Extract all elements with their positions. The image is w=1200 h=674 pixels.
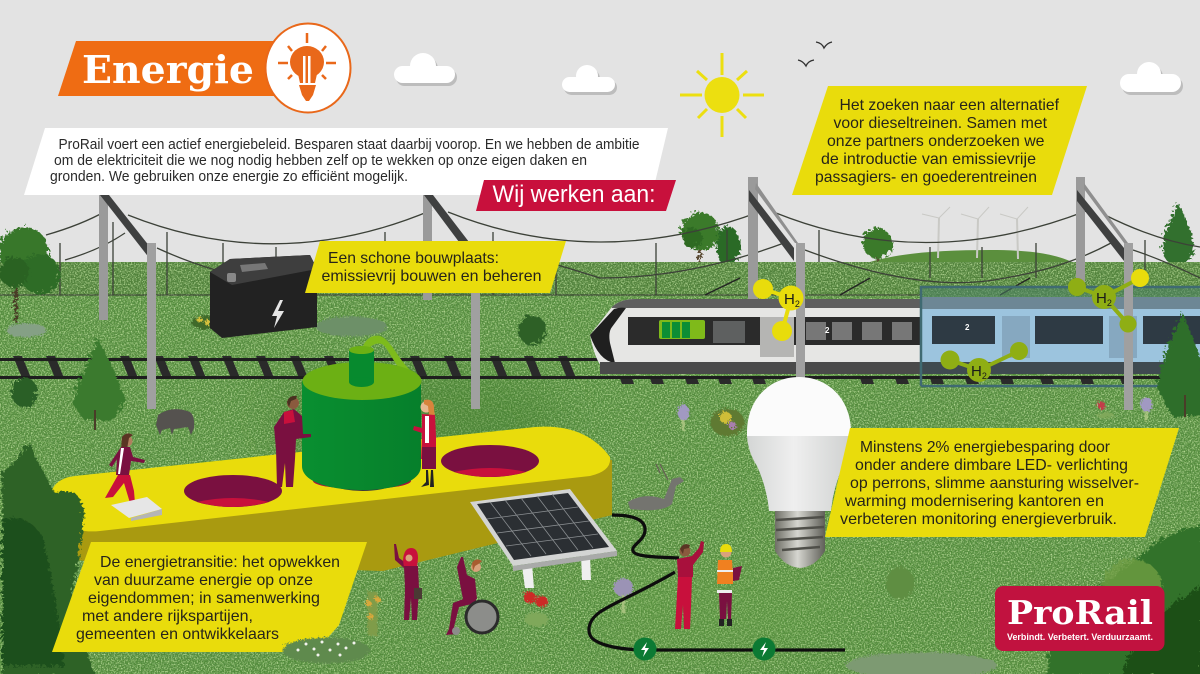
hydrogen molecules [753, 269, 1149, 382]
solar panel [470, 489, 617, 588]
heading: wij werken aan: Wij werken aan: [492, 181, 656, 208]
H2 molecule 1: 2 [795, 299, 800, 309]
H2 molecule 1: H [784, 291, 795, 308]
callout: energiebesparing: verbeteren monitoring energieverbruik. [840, 511, 1117, 528]
cloud left [394, 53, 457, 86]
board top [50, 427, 610, 531]
callout: energietransitie: gemeenten en ontwikkelaars [76, 626, 279, 643]
H2 molecule 2 [1068, 269, 1149, 332]
H2 molecule 3: 2 [982, 371, 987, 381]
small flowers and shrubs [5, 314, 1151, 674]
callout: energietransitie: van duurzame energie op onze [94, 572, 313, 589]
train body white [590, 299, 920, 374]
socket hole right [441, 445, 539, 477]
front pylons [147, 242, 1133, 410]
cloud middle [562, 65, 617, 95]
callout: dieseltreinen [792, 86, 1087, 195]
callout: dieseltreinen: Het zoeken naar een alternatief [840, 97, 1060, 114]
pylons back row [99, 177, 1128, 320]
cable energy nodes [634, 638, 776, 660]
banner ribbon [58, 41, 285, 96]
callout: energiebesparing: onder andere dimbare LED- verlichting [855, 457, 1128, 474]
socket under plug [313, 473, 411, 489]
intro text panel: ProRail voert een actief energiebeleid. Besparen staat daarbij voorop. En we hebben de ambitie [58, 136, 640, 153]
board side [50, 460, 612, 571]
battery [210, 255, 317, 338]
train roof [612, 299, 920, 308]
railway track [0, 356, 1200, 384]
callout: energiebesparing: op perrons, slimme aansturing wisselver- [850, 475, 1139, 492]
boar [156, 409, 194, 435]
figure: man beside plug [274, 396, 311, 487]
intro text panel [24, 128, 668, 195]
callout: energiebesparing: warming modernisering kantoren en [844, 493, 1104, 510]
train doors and windows: 2 [825, 326, 830, 335]
train [590, 287, 1200, 386]
intro text panel: gronden. We gebruiken onze energie zo efficiënt mogelijk. [50, 168, 408, 185]
callout: dieseltreinen: passagiers- en goederentreinen [815, 169, 1037, 186]
hill with wind turbines [870, 207, 1072, 262]
undercarriage [600, 362, 920, 374]
trees in field [0, 225, 1200, 597]
white flowering shrub [281, 636, 369, 662]
train front [590, 308, 626, 363]
power cable [589, 515, 845, 650]
pantograph wires and overhead lines [0, 210, 1200, 299]
H2 molecule 1 [753, 279, 804, 341]
grass field [0, 262, 1200, 674]
figure: woman with headscarf [394, 544, 422, 620]
intro text panel: om de elektriciteit die we nog nodig hebben zelf op te wekken op onze eigen daken en [54, 152, 587, 169]
train doors and windows [713, 317, 912, 357]
icon: birds [798, 42, 832, 66]
title banner [58, 24, 350, 112]
battery icon on train [659, 320, 705, 339]
icon: sun [680, 53, 764, 137]
right foreground bush [1045, 524, 1200, 674]
trees on horizon [679, 200, 1192, 264]
figure: worker in hi-vis vest [717, 544, 742, 626]
callout: energiebesparing [825, 428, 1179, 537]
figure: woman beside plug [413, 400, 436, 487]
left foreground bush [0, 440, 94, 674]
cloud right [1120, 62, 1183, 95]
callout: energietransitie [52, 542, 367, 652]
power strip: yellow plug board [50, 427, 612, 571]
H2 molecule 3: H [971, 363, 982, 380]
ProRail logo [995, 586, 1164, 651]
callout: schone bouwplaats: Een schone bouwplaats: [328, 250, 499, 267]
title text: Energie [82, 47, 254, 92]
callout: energiebesparing: Minstens 2% energiebesparing door [860, 439, 1111, 456]
callout: energietransitie: De energietransitie: het opwekken [100, 554, 340, 571]
callout: energietransitie: eigendommen; in samenwerking [88, 590, 320, 607]
H2 molecule 2: H [1096, 290, 1107, 307]
blue carriage [920, 297, 1200, 374]
green plug cylinder [302, 336, 422, 490]
figure: person waving near cable [675, 541, 704, 629]
ProRail logo: ProRail [1007, 593, 1153, 632]
callout: dieseltreinen: onze partners onderzoeken we [827, 133, 1045, 150]
figure: stepping woman [105, 433, 162, 521]
LED light bulb [747, 377, 851, 568]
callout: dieseltreinen: voor dieseltreinen. Samen met [834, 115, 1048, 132]
glass overlay frame [921, 287, 1200, 386]
blue carriage: 2 [965, 323, 970, 332]
figure: person in wheelchair [446, 557, 498, 635]
callout: schone bouwplaats [305, 241, 566, 293]
socket hole left [184, 475, 282, 507]
deer [628, 464, 684, 510]
train window band [628, 317, 920, 345]
callout: schone bouwplaats: emissievrij bouwen en beheren [322, 268, 542, 285]
callout: energietransitie: met andere rijkspartijen, [82, 608, 253, 625]
lightbulb icon [266, 24, 350, 112]
callout: dieseltreinen: de introductie van emissievrije [821, 151, 1036, 168]
H2 molecule 3 [940, 342, 1028, 382]
ProRail logo: Verbindt. Verbetert. Verduurzaamt. [1007, 632, 1153, 643]
H2 molecule 2: 2 [1107, 298, 1112, 308]
